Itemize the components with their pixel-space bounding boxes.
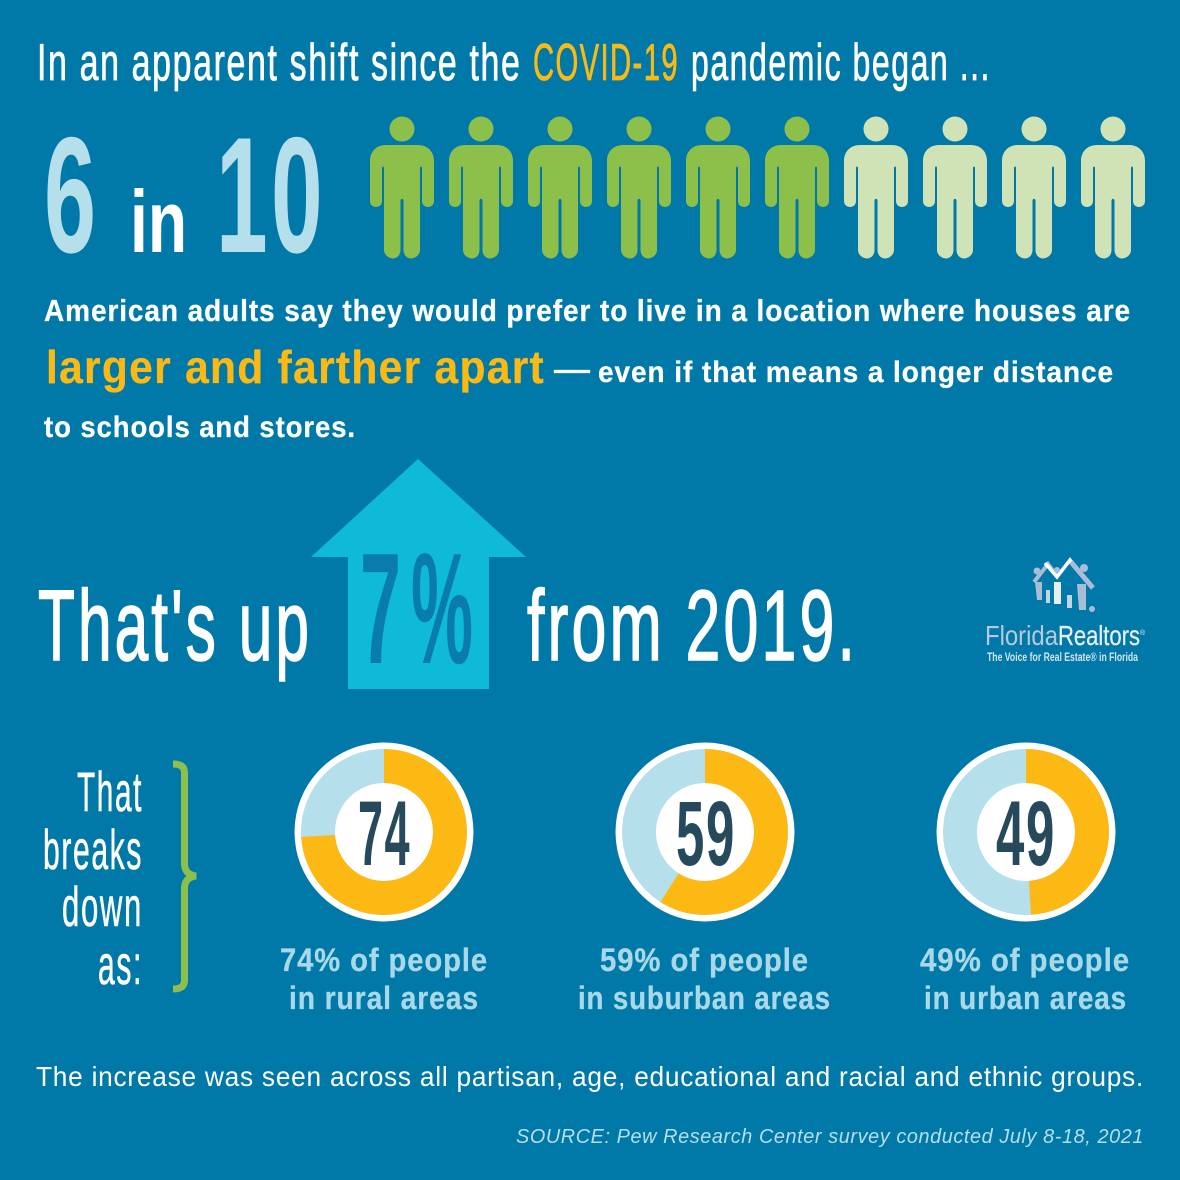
logo icon	[1034, 560, 1095, 612]
title: pandemic began ...	[691, 34, 991, 92]
description text: to schools and stores.	[44, 411, 356, 444]
curly brace	[173, 764, 196, 989]
logo: Florida Realtors: ®	[1140, 629, 1146, 637]
source line: SOURCE: Pew Research Center survey conducted July 8-18, 2021	[516, 1126, 1144, 1148]
statistic: 6 in 10: 6	[44, 103, 96, 287]
up from 2019 statement: That's up	[38, 570, 312, 682]
statistic: 6 in 10: 10	[216, 103, 326, 287]
label: urban: 49% of people	[920, 942, 1130, 978]
statistic: 6 in 10	[44, 103, 326, 287]
up from 2019 statement: from 2019.	[527, 570, 858, 682]
donut: suburban 59	[616, 742, 794, 922]
breakdown label: breaks	[43, 818, 143, 881]
title: In an apparent shift since the	[37, 34, 522, 92]
arrow with 7%: 7	[360, 521, 401, 697]
label: rural: 74% of people	[280, 942, 488, 978]
logo wordmark: Florida	[985, 620, 1058, 651]
donut: suburban 59: 59	[676, 783, 736, 885]
donut: urban 49	[936, 742, 1116, 922]
statistic: 6 in 10: in	[130, 172, 187, 271]
pictogram: 6 of 10 people highlighted	[370, 116, 1145, 258]
label: suburban: 59% of people	[600, 942, 809, 978]
label: urban: in urban areas	[924, 980, 1127, 1016]
logo: Florida Realtors: Realtors	[1058, 620, 1140, 651]
label: suburban: in suburban areas	[578, 980, 831, 1016]
title: COVID-19	[533, 34, 679, 92]
donut: urban 49: 49	[996, 783, 1056, 885]
breakdown label: That	[77, 760, 143, 823]
description text: even if that means a longer distance	[598, 356, 1114, 389]
up from 2019 statement	[38, 570, 858, 682]
description text	[44, 293, 1131, 444]
label: rural: in rural areas	[289, 980, 479, 1016]
label: urban	[920, 942, 1130, 1016]
logo: Florida Realtors	[985, 560, 1146, 664]
breakdown label	[43, 760, 143, 996]
breakdown label: as:	[98, 933, 143, 996]
donut: rural 74: 74	[358, 783, 411, 885]
arrow with 7%: %	[411, 521, 473, 697]
donut: rural 74	[294, 742, 474, 922]
label: rural	[280, 942, 488, 1016]
breakdown label: down	[62, 875, 143, 938]
label: suburban	[578, 942, 831, 1016]
description text: larger and farther apart	[46, 341, 545, 393]
arrow with 7%	[311, 459, 526, 697]
